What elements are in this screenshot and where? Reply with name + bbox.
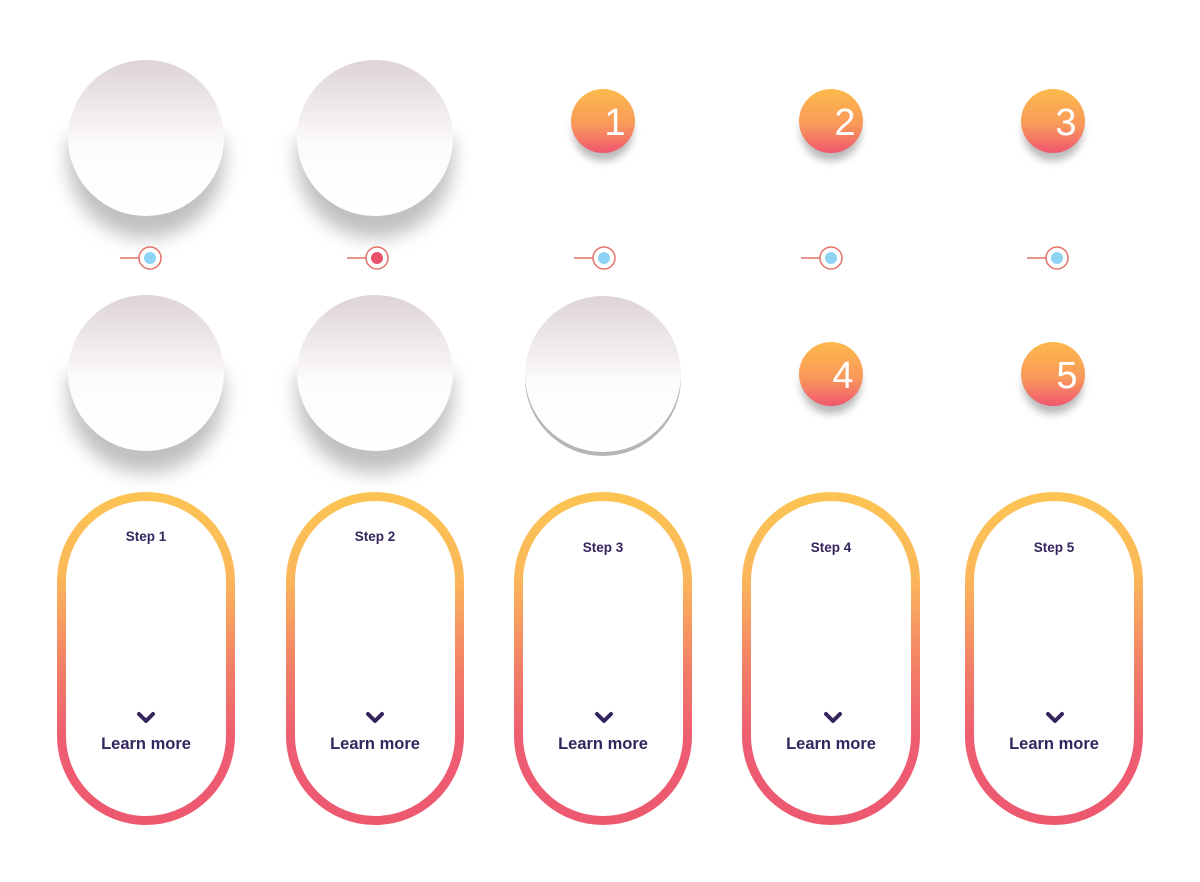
badge 3 xyxy=(1021,89,1085,161)
connector node 2 (active) xyxy=(347,247,388,269)
pill card: step 2 xyxy=(290,496,460,820)
disc: bottom row col 3 xyxy=(525,296,681,456)
badge 2: 2 xyxy=(834,102,856,144)
disc: top row col 1 xyxy=(68,60,224,238)
pill card: step 3 xyxy=(518,496,688,820)
pill card: step 4 xyxy=(746,496,916,820)
connector node 1 xyxy=(120,247,161,269)
pill card: step 4: Learn more xyxy=(786,735,876,753)
connector node 5 xyxy=(1027,247,1068,269)
pill card: step 5: Step 5 xyxy=(1034,540,1075,555)
disc: bottom row col 2 xyxy=(297,295,453,473)
pill card: step 2: Learn more xyxy=(330,735,420,753)
badge 4: 4 xyxy=(832,355,854,397)
pill card: step 5 xyxy=(970,496,1138,820)
badge 5 xyxy=(1021,342,1085,414)
pill card: step 4: Step 4 xyxy=(811,540,852,555)
pill card: step 1: Step 1 xyxy=(126,529,167,544)
badge 3: 3 xyxy=(1055,102,1077,144)
pill card: step 3: Learn more xyxy=(558,735,648,753)
badge 1: 1 xyxy=(604,102,626,144)
pill card: step 1 xyxy=(62,496,230,820)
badge 2 xyxy=(799,89,863,161)
badge 4 xyxy=(799,342,863,414)
connector node 3 xyxy=(574,247,615,269)
pill card: step 3: Step 3 xyxy=(583,540,624,555)
pill card: step 1: Learn more xyxy=(101,735,191,753)
badge 5: 5 xyxy=(1056,355,1078,397)
disc: top row col 2 xyxy=(297,60,453,238)
pill card: step 2: Step 2 xyxy=(355,529,395,544)
disc: bottom row col 1 xyxy=(68,295,224,473)
badge 1 xyxy=(571,89,635,161)
pill card: step 5: Learn more xyxy=(1009,735,1099,753)
connector node 4 xyxy=(801,247,842,269)
